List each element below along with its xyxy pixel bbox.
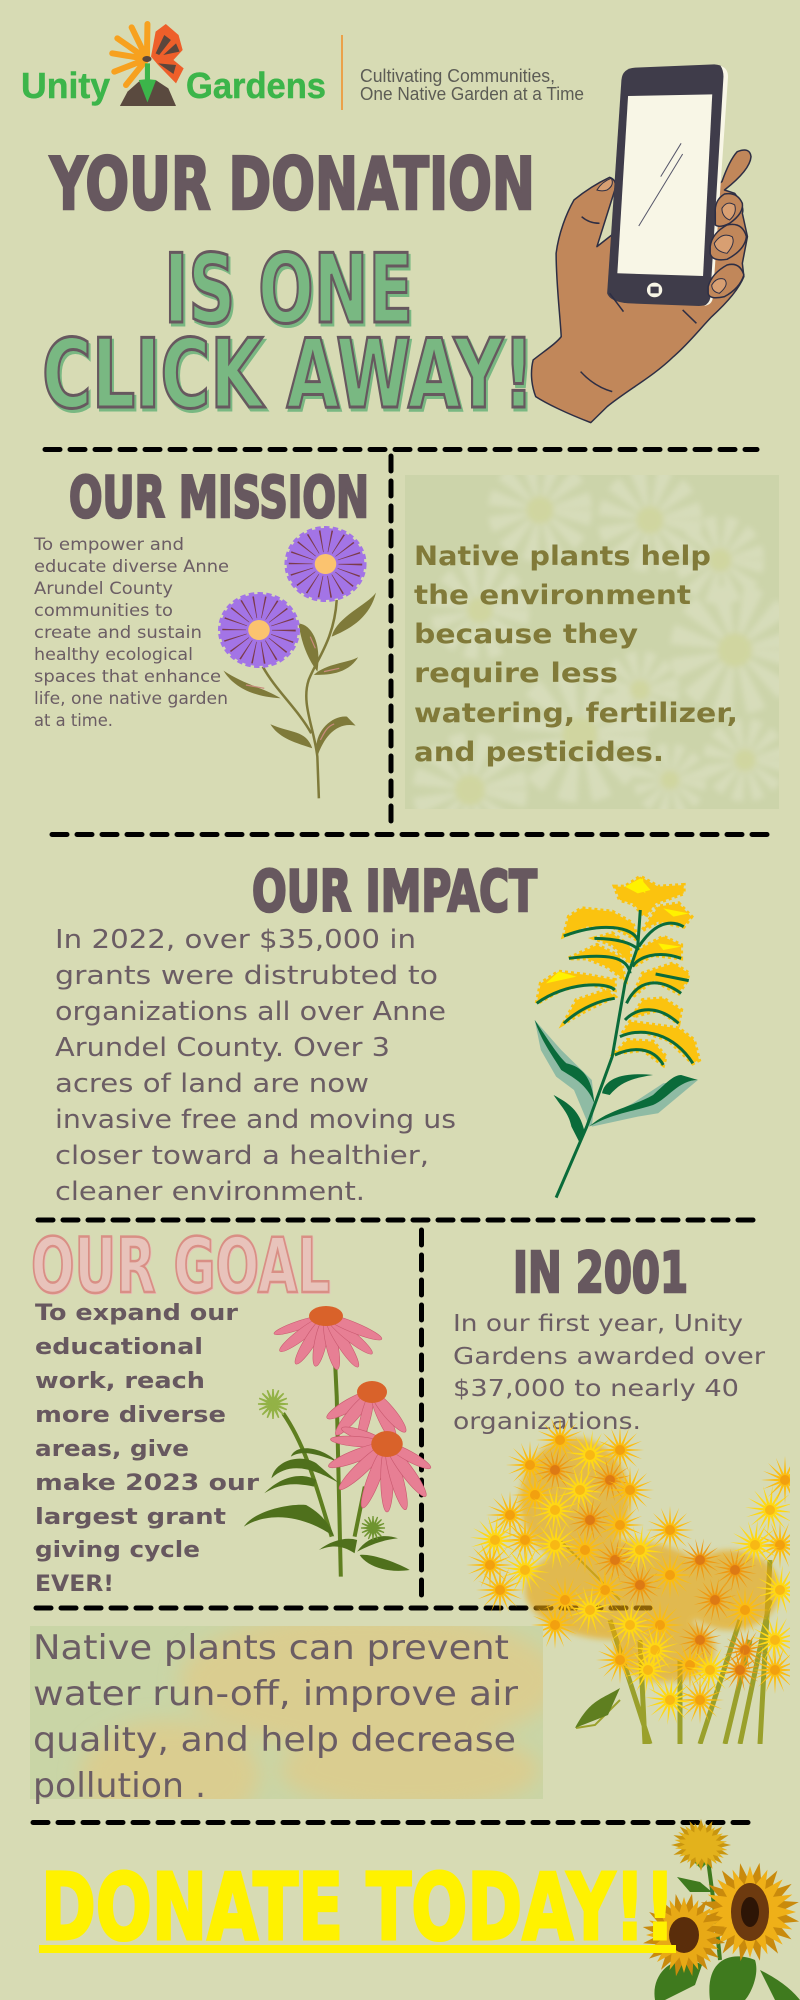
mission text: educate diverse Anne	[34, 557, 229, 576]
our goal shadow: OUR GOAL	[32, 1222, 331, 1311]
impact text: closer toward a healthier,	[55, 1141, 429, 1171]
in 2001 text: In our first year, Unity	[453, 1309, 743, 1337]
impact text: In 2022, over $35,000 in	[55, 925, 416, 955]
in 2001 text: Gardens awarded over	[453, 1342, 765, 1370]
coneflower bloom top	[272, 1306, 384, 1370]
coneflower bloom lower	[326, 1424, 433, 1512]
logo icon: flower, butterfly and trowel	[112, 24, 184, 106]
impact text: invasive free and moving us	[55, 1105, 456, 1135]
panel text: and pesticides.	[414, 737, 664, 768]
coneflower bud right	[361, 1516, 385, 1540]
heading: our mission: OUR MISSION	[69, 465, 369, 531]
impact text: cleaner environment.	[55, 1177, 365, 1207]
panel text: the environment	[414, 580, 691, 611]
coneflower stems and leaves	[244, 1343, 410, 1577]
impact text: grants were distrubted to	[55, 961, 438, 991]
panel text: water run-off, improve air	[33, 1674, 518, 1714]
goal text: EVER!	[35, 1571, 114, 1597]
goal text: areas, give	[35, 1436, 189, 1462]
sunflower top bud	[670, 1818, 732, 1872]
mission text: life, one native garden	[34, 689, 228, 708]
title line 3 text: CLICK AWAY!	[42, 320, 534, 430]
our goal text: OUR GOAL	[31, 1221, 330, 1310]
impact text: organizations all over Anne	[55, 997, 446, 1027]
illustration: purple asters	[220, 528, 376, 798]
illustration: sunflowers	[635, 1818, 800, 2000]
impact text: Arundel County. Over 3	[55, 1033, 390, 1063]
goal text: work, reach	[35, 1368, 205, 1394]
illustration: golden ragwort bouquet	[466, 1416, 800, 1744]
title line 2	[164, 235, 415, 348]
donate today underline	[39, 1945, 676, 1953]
logo wordmark left: Unity	[21, 65, 110, 106]
impact text: acres of land are now	[55, 1069, 369, 1099]
heading: our impact: OUR IMPACT	[252, 859, 537, 925]
panel text: because they	[414, 619, 638, 650]
coneflower bud left	[258, 1389, 288, 1419]
panel text: quality, and help decrease	[33, 1720, 516, 1760]
illustration: pink coneflowers	[244, 1306, 433, 1577]
mission text: at a time.	[34, 711, 113, 730]
panel text: require less	[414, 658, 618, 689]
heading: our goal	[31, 1221, 331, 1311]
logo divider	[341, 35, 343, 110]
coneflower bloom middle	[324, 1381, 410, 1445]
panel text: pollution .	[33, 1766, 206, 1806]
in 2001 text: organizations.	[453, 1407, 641, 1435]
mission text: communities to	[34, 601, 173, 620]
mission text: healthy ecological	[34, 645, 193, 664]
mission text: create and sustain	[34, 623, 202, 642]
title line 1: YOUR DONATION	[49, 142, 535, 226]
panel: native plants can prevent water run-off	[30, 1626, 543, 1804]
mission text: To empower and	[33, 535, 184, 554]
sunflower stems and leaves	[654, 1860, 800, 2000]
logo: Unity Gardens	[21, 24, 584, 110]
sunflower large	[691, 1853, 800, 1971]
logo tagline: One Native Garden at a Time	[360, 84, 584, 104]
title line 2 text: IS ONE	[164, 235, 413, 345]
mission text: Arundel County	[34, 579, 173, 598]
title line 3 shadow: CLICK AWAY!	[44, 323, 536, 433]
panel photo: faded daisies	[405, 475, 779, 819]
panel photo: faded butterfly weed	[30, 1626, 543, 1799]
title line 2 shadow: IS ONE	[166, 238, 415, 348]
illustration: goldenrod	[535, 877, 699, 1198]
panel text: Native plants can prevent	[33, 1628, 509, 1668]
aster bloom upper	[287, 528, 364, 600]
logo tagline: Cultivating Communities,	[360, 66, 555, 86]
goal text: educational	[35, 1334, 203, 1360]
title line 3	[42, 320, 536, 433]
goal text: giving cycle	[35, 1537, 200, 1563]
panel text: Native plants help	[414, 541, 711, 572]
aster bloom lower	[220, 594, 298, 666]
panel: native plants help the environment	[405, 475, 779, 819]
sunflower small	[635, 1886, 733, 1984]
goal text: more diverse	[35, 1402, 226, 1428]
aster stems and leaves	[223, 593, 376, 798]
call to action: donate today	[39, 1854, 676, 1961]
mission text: spaces that enhance	[34, 667, 221, 686]
goal text: To expand our	[35, 1300, 239, 1326]
heading: in 2001: IN 2001	[513, 1241, 688, 1306]
panel text: watering, fertilizer,	[414, 698, 738, 729]
logo wordmark right: Gardens	[186, 65, 326, 106]
in 2001 text: $37,000 to nearly 40	[453, 1374, 739, 1402]
icon: hand holding phone	[531, 64, 751, 423]
goal text: largest grant	[35, 1504, 226, 1530]
goal text: make 2023 our	[35, 1470, 260, 1496]
